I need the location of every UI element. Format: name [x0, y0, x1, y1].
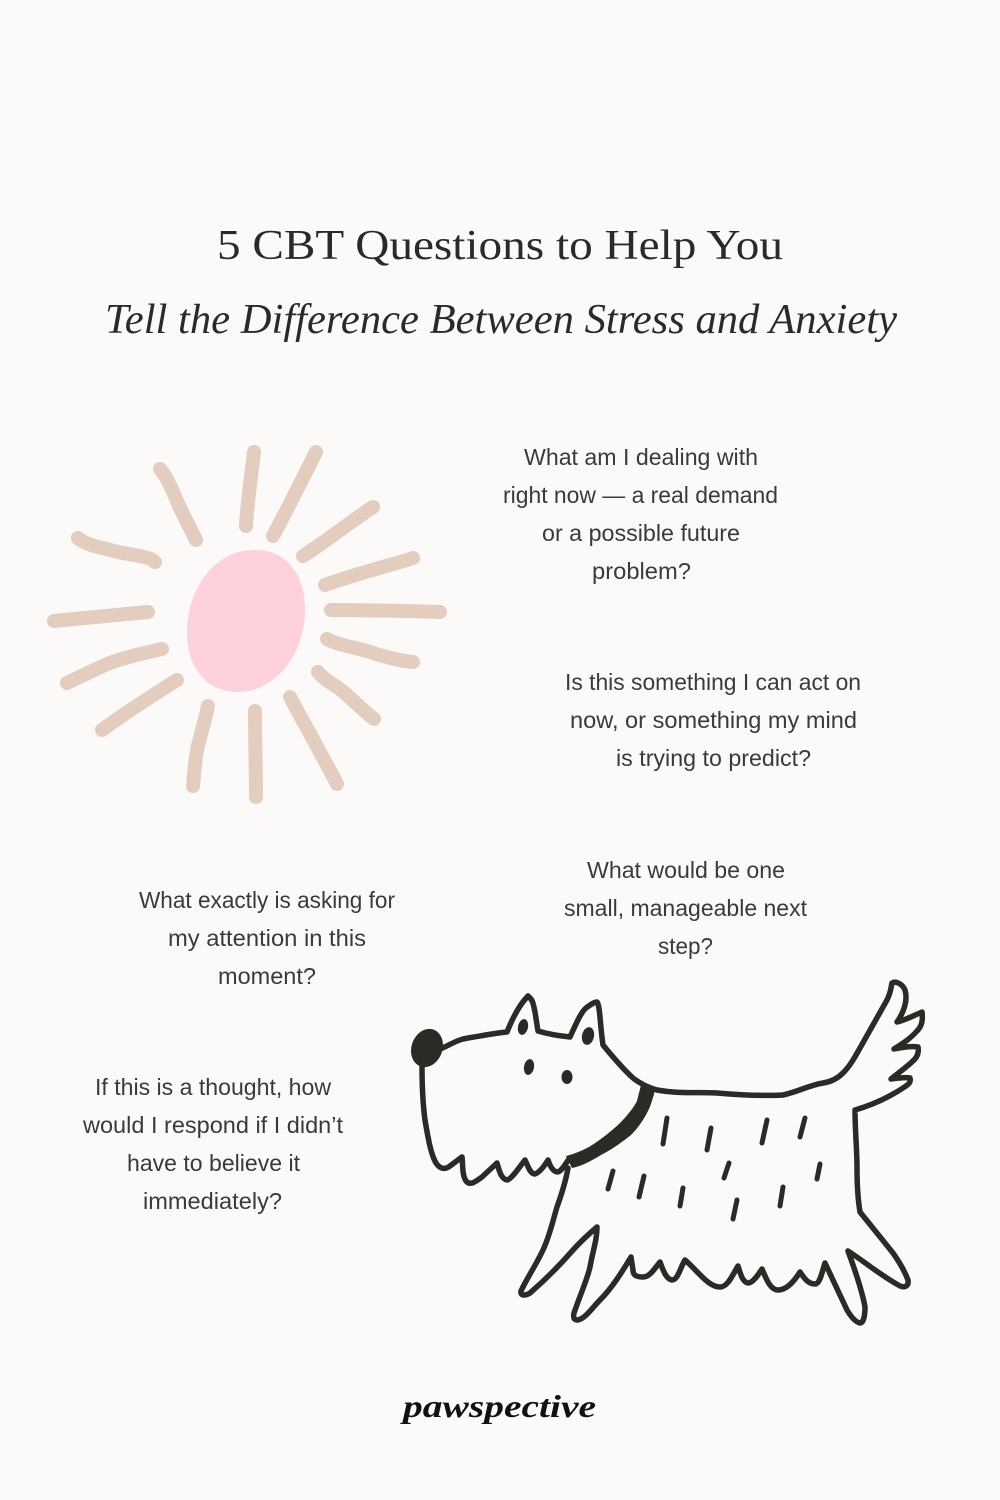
- title line 2: Tell the Difference Between Stress and Anxiety: [105, 297, 897, 343]
- question 1: or a possible future: [542, 520, 740, 546]
- question 5: immediately?: [143, 1188, 282, 1214]
- icon: dog illustration: [406, 982, 922, 1323]
- sun rays: [54, 452, 440, 797]
- question 5: [82, 1074, 343, 1214]
- dog eyes and inner ears: [516, 1018, 596, 1084]
- question 4: moment?: [218, 963, 316, 989]
- question 1: problem?: [592, 558, 691, 584]
- icon: sun: [54, 452, 440, 797]
- question 4: my attention in this: [168, 925, 366, 951]
- question 5: would I respond if I didn’t: [82, 1112, 343, 1138]
- question 3: What would be one: [587, 857, 785, 883]
- question 2: now, or something my mind: [570, 707, 857, 733]
- dog nose: [406, 1024, 448, 1072]
- dog outline: [440, 982, 922, 1323]
- dog fur marks: [608, 1118, 820, 1219]
- question 1: What am I dealing with: [524, 444, 758, 470]
- sun core: [187, 550, 305, 692]
- question 1: right now — a real demand: [503, 482, 778, 508]
- dog muzzle: [422, 1066, 570, 1183]
- question 3: [564, 857, 807, 959]
- dog collar: [566, 1085, 655, 1168]
- question 4: [139, 887, 395, 989]
- question 5: have to believe it: [127, 1150, 300, 1176]
- question 3: step?: [658, 933, 713, 959]
- logo: pawspective: pawspective: [399, 1388, 596, 1424]
- question 2: [565, 669, 861, 771]
- question 4: What exactly is asking for: [139, 887, 395, 913]
- title line 1: 5 CBT Questions to Help You: [217, 223, 783, 269]
- title: [105, 223, 897, 343]
- question 3: small, manageable next: [564, 895, 807, 921]
- question 2: Is this something I can act on: [565, 669, 861, 695]
- question 1: [503, 444, 778, 584]
- question 5: If this is a thought, how: [95, 1074, 332, 1100]
- question 2: is trying to predict?: [616, 745, 811, 771]
